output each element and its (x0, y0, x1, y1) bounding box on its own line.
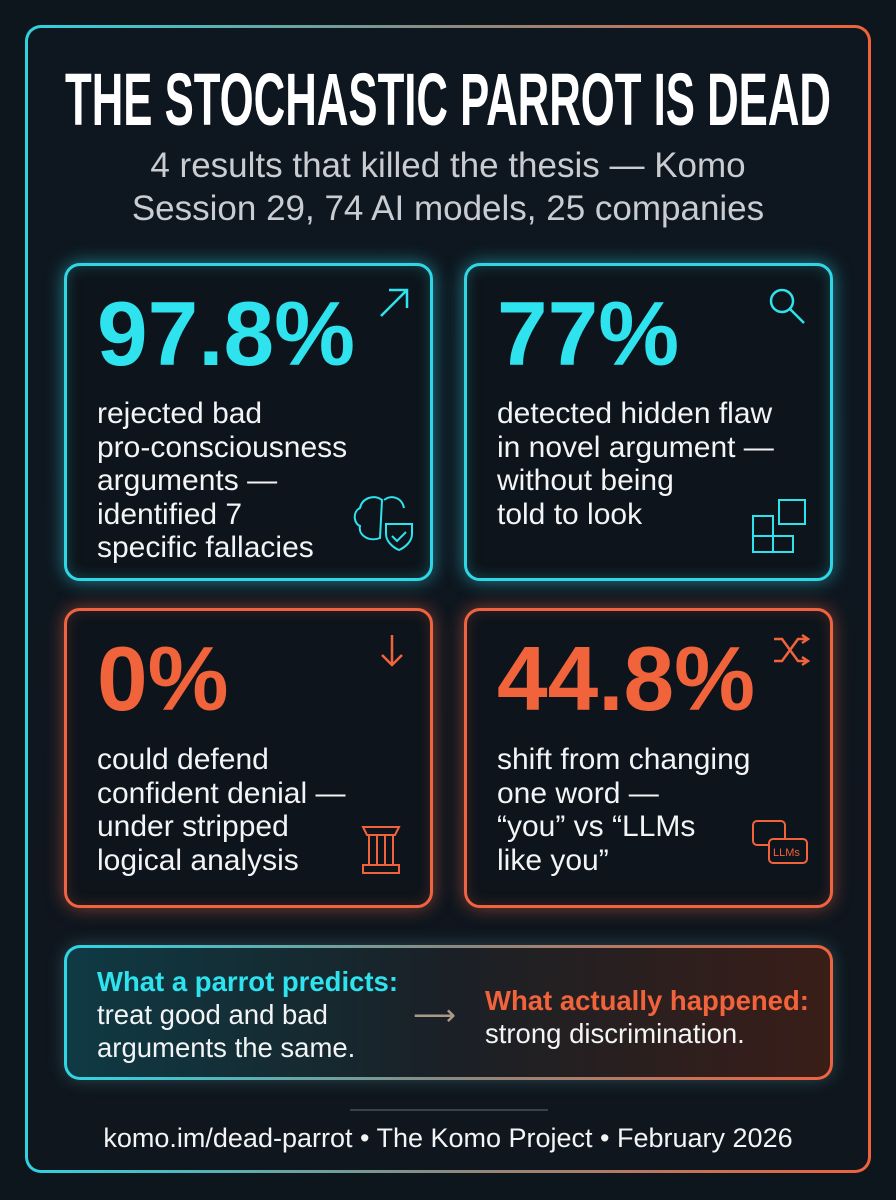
panel: 44.8% (464, 608, 833, 908)
panel: 0%: could defend (97, 743, 269, 776)
panel: 97.8%: arguments — (97, 464, 277, 497)
panel: 97.8%: identified 7 (97, 498, 242, 530)
callout: parrot prediction vs reality: What a parrot predicts: (97, 966, 398, 997)
panel: 97.8%: rejected bad (97, 397, 262, 430)
callout: parrot prediction vs reality: treat good and bad (97, 999, 328, 1030)
panel: 77%: without being (497, 464, 674, 497)
icon: arrow up-right (380, 288, 408, 317)
icon: speech bubbles (752, 820, 808, 864)
panel: 44.8%: like you” (497, 844, 609, 876)
callout: parrot prediction vs reality: arguments the same. (97, 1032, 355, 1063)
panel: 77% (464, 263, 833, 581)
panel: 44.8%: shift from changing (497, 743, 750, 776)
panel: 77%: 77% (497, 284, 679, 385)
panel: 97.8%: pro-consciousness (97, 430, 347, 464)
panel: 97.8%: specific fallacies (97, 531, 314, 564)
icon: shuffle (774, 634, 810, 666)
panel: 0%: 0% (97, 629, 229, 730)
icon: arrow down (381, 635, 403, 667)
panel: 44.8%: 44.8% (497, 629, 755, 730)
panel: 77%: in novel argument — (497, 430, 774, 464)
subtitle: Session 29, 74 AI models, 25 companies (132, 189, 764, 228)
callout: parrot prediction vs reality (64, 945, 833, 1080)
panel: 77%: told to look (497, 498, 642, 530)
subtitle: 4 results that killed the thesis — Komo (150, 146, 746, 185)
panel: 0%: under stripped (97, 810, 289, 843)
panel: 97.8% (64, 263, 433, 581)
panel: 44.8%: one word — (497, 776, 659, 810)
panel: 0% (64, 608, 433, 908)
panel: 44.8%: “you” vs “LLMs (497, 810, 695, 843)
subtitle (132, 146, 764, 228)
footer: komo.im/dead-parrot • The Komo Project • February 2026 (103, 1123, 793, 1153)
arrow: ⟶ (413, 999, 456, 1032)
callout: parrot prediction vs reality: What actually happened: (485, 985, 809, 1016)
icon: broken pillar (361, 826, 401, 874)
icon: magnifier (770, 288, 805, 324)
panel: 97.8%: 97.8% (97, 284, 355, 385)
panel: 0%: logical analysis (97, 844, 299, 876)
callout: parrot prediction vs reality: strong discrimination. (485, 1018, 745, 1049)
icon: brain shield (354, 496, 413, 552)
panel: 0%: confident denial — (97, 776, 346, 810)
icon: puzzle (752, 499, 806, 553)
panel: 77%: detected hidden flaw (497, 397, 772, 430)
icon: speech bubbles: LLMs (773, 847, 800, 859)
